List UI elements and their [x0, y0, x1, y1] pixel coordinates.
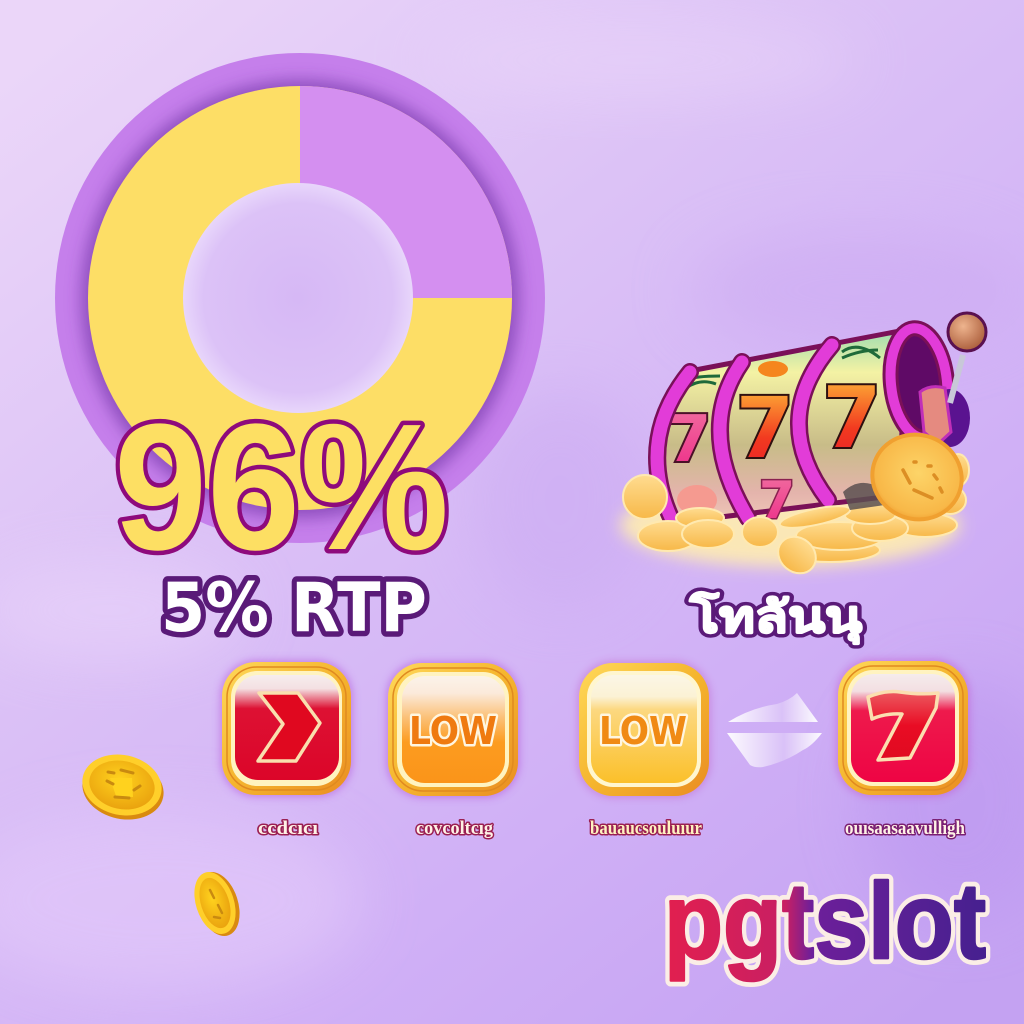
reel symbols: 7 [822, 369, 882, 468]
captions under tiles: covcoltcıg [416, 818, 493, 839]
pile of coins [623, 454, 969, 581]
label: 5% RTP: 5% RTP [161, 569, 427, 648]
icon: seven [868, 692, 938, 760]
reel symbols [667, 347, 882, 531]
drum body [660, 330, 905, 522]
captions under tiles: bauaucsouluıur [590, 818, 702, 839]
drum end [885, 325, 953, 441]
step 3: yellow LOW tile [577, 661, 711, 798]
label: reel caption: โทลันนุ [689, 590, 862, 645]
coin pile glow [620, 483, 960, 567]
step 1: red arrow tile [220, 660, 353, 797]
captions under tiles [258, 818, 965, 839]
label: reel caption: โทลันนุ [689, 590, 862, 645]
yellow segment [88, 86, 512, 510]
reel symbols: 7 [736, 379, 794, 477]
magenta rims [657, 345, 832, 520]
centre hole [183, 183, 413, 413]
captions under tiles: ouısaasaavulligh [845, 818, 965, 839]
logo: pgtslot: pgtslot [664, 860, 986, 981]
icon: slot machine with coins [620, 313, 986, 581]
lever [950, 355, 963, 403]
purple segment [300, 86, 512, 298]
icon: chevron [258, 693, 320, 761]
headline value 96%: 96% [114, 387, 449, 588]
label: LOW: LOW [599, 709, 687, 753]
icon: gold coin left [77, 747, 169, 827]
outer purple ring [55, 53, 545, 543]
arrow: exchange between tiles [727, 693, 822, 767]
large coin [860, 422, 974, 532]
step 4: crimson seven tile [836, 659, 970, 797]
icon: gold coin bottom [187, 866, 247, 942]
reel symbols: 7 [759, 471, 795, 531]
hub and crank [930, 389, 970, 447]
reel symbols: 7 [667, 403, 711, 477]
donut chart: 96% RTP [55, 53, 545, 543]
logo: pgtslot: pgtslot [664, 860, 986, 981]
step 2: orange LOW tile [386, 661, 520, 798]
label: LOW: LOW [409, 709, 497, 753]
captions under tiles: ccdcıcı [258, 818, 318, 839]
